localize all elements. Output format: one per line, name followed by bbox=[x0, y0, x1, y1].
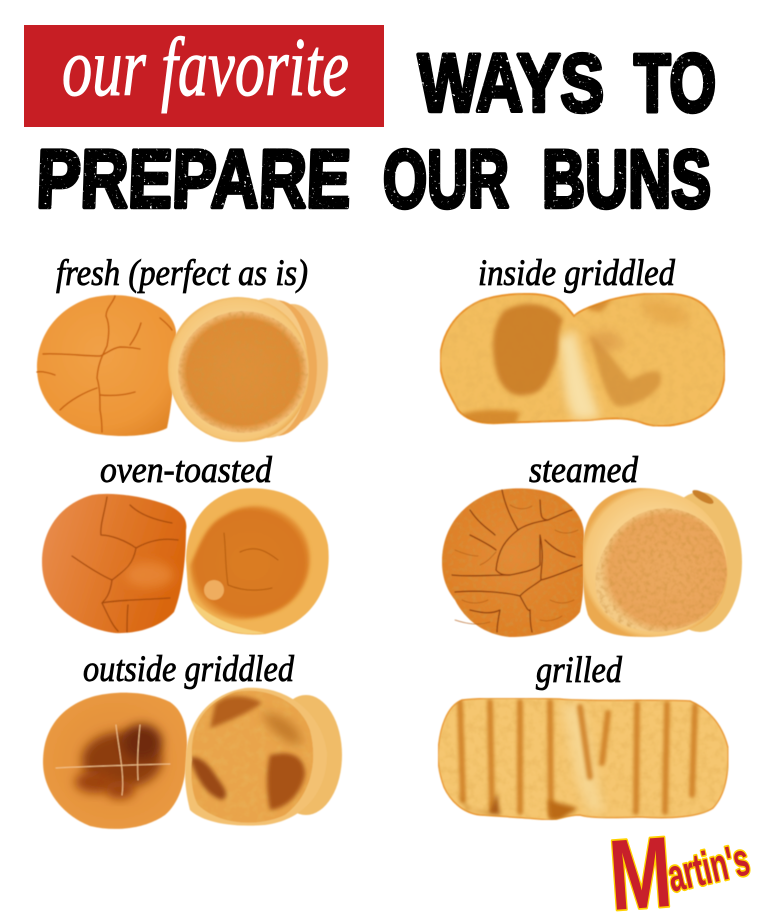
logo: Martin's bbox=[606, 816, 754, 924]
title block bbox=[24, 21, 716, 225]
label: inside griddled: inside griddled bbox=[478, 253, 675, 294]
heading line two: OUR bbox=[383, 134, 509, 225]
heading line one: TO bbox=[634, 38, 716, 129]
inside griddled bun bbox=[440, 293, 725, 426]
panel: outside griddled bbox=[43, 649, 342, 829]
outside griddled bun top bbox=[43, 693, 187, 829]
label: steamed: steamed bbox=[529, 450, 638, 491]
heading line one: WAYS bbox=[418, 38, 604, 129]
panel: inside griddled bbox=[440, 253, 725, 426]
heading line two: BUNS bbox=[542, 134, 711, 225]
panel: steamed bbox=[442, 450, 742, 637]
red banner: our favorite bbox=[24, 21, 384, 127]
oven-toasted bun bottom bbox=[186, 488, 329, 635]
panel: grilled bbox=[438, 650, 728, 820]
label: oven-toasted: oven-toasted bbox=[100, 450, 272, 491]
fresh bun bottom bbox=[168, 297, 328, 442]
grilled bun bbox=[438, 698, 728, 820]
heading line two: PREPARE bbox=[35, 134, 352, 225]
label: fresh: fresh (perfect as is) bbox=[56, 253, 308, 294]
fresh bun top bbox=[37, 295, 176, 436]
label: outside griddled: outside griddled bbox=[83, 649, 294, 690]
outside griddled bun bottom bbox=[185, 688, 342, 826]
steamed bun top bbox=[442, 488, 584, 637]
label: grilled: grilled bbox=[536, 650, 622, 691]
panel: fresh bbox=[37, 253, 328, 442]
steamed bun bottom bbox=[583, 488, 742, 637]
panel: oven-toasted bbox=[42, 450, 329, 635]
red banner: our favorite: our favorite bbox=[62, 21, 349, 114]
heading line two bbox=[35, 134, 711, 225]
oven-toasted bun top bbox=[42, 494, 186, 633]
